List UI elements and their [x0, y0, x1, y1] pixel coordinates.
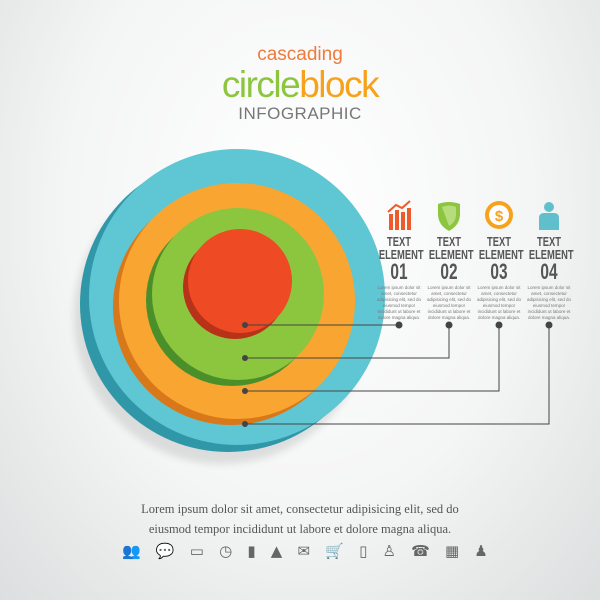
- icon: person: [539, 202, 559, 230]
- connector lines: [245, 325, 549, 424]
- icon row: ▭: [190, 542, 204, 560]
- column 1: 01: [390, 259, 408, 284]
- icon row: ◷: [219, 542, 232, 560]
- column 3: TEXT: [487, 234, 511, 249]
- body text: Lorem ipsum dolor sit amet, consectetur adipisicing elit, sed do: [141, 502, 459, 516]
- icon row: [122, 542, 488, 560]
- chart: cascading circles: $: [495, 208, 504, 225]
- column 3: [477, 234, 524, 320]
- title: INFOGRAPHIC: [238, 104, 362, 123]
- title: cascading: [257, 44, 343, 65]
- body text: eiusmod tempor incididunt ut labore et dolore magna aliqua.: [149, 522, 451, 536]
- column 3: ELEMENT: [479, 247, 524, 262]
- icon row: 🛒: [325, 542, 344, 560]
- column 2: Lorem ipsum dolor sit amet, consectetur adipisicing elit, sed do eiusmod tempor incididunt ut labore et dolore magna aliqua.: [427, 285, 471, 320]
- title: circleblock: [222, 64, 378, 105]
- column 2: 02: [440, 259, 458, 284]
- icon row: ♟: [474, 542, 488, 560]
- column 1: Lorem ipsum dolor sit amet, consectetur adipisicing elit, sed do eiusmod tempor incididunt ut labore et dolore magna aliqua.: [377, 285, 421, 320]
- column 3: Lorem ipsum dolor sit amet, consectetur adipisicing elit, sed do eiusmod tempor incididunt ut labore et dolore magna aliqua.: [477, 285, 521, 320]
- column 2: [427, 234, 474, 320]
- column 1: TEXT: [387, 234, 411, 249]
- icon: dollar: [485, 201, 513, 229]
- column 4: ELEMENT: [529, 247, 574, 262]
- icon row: ▮: [247, 542, 256, 560]
- icon row: 👥: [122, 542, 141, 560]
- column 4: TEXT: [537, 234, 561, 249]
- column 4: 04: [540, 259, 558, 284]
- body text: [141, 502, 459, 536]
- column 4: Lorem ipsum dolor sit amet, consectetur adipisicing elit, sed do eiusmod tempor incididunt ut labore et dolore magna aliqua.: [527, 285, 571, 320]
- title: [222, 44, 380, 123]
- column 1: [377, 234, 424, 320]
- icon row: 💬: [156, 542, 175, 560]
- column 3: 03: [490, 259, 508, 284]
- icon: shield: [438, 202, 460, 231]
- icon: bar chart: [388, 201, 411, 230]
- column 2: ELEMENT: [429, 247, 474, 262]
- icon row: ☎: [411, 542, 430, 560]
- icon row: ✉: [298, 542, 310, 560]
- column 2: TEXT: [437, 234, 461, 249]
- icon row: ▲: [271, 542, 282, 560]
- column 1: ELEMENT: [379, 247, 424, 262]
- icon row: ▯: [359, 542, 367, 560]
- icon row: ♙: [383, 542, 396, 560]
- icon row: ▦: [445, 542, 459, 560]
- column 4: [527, 234, 574, 320]
